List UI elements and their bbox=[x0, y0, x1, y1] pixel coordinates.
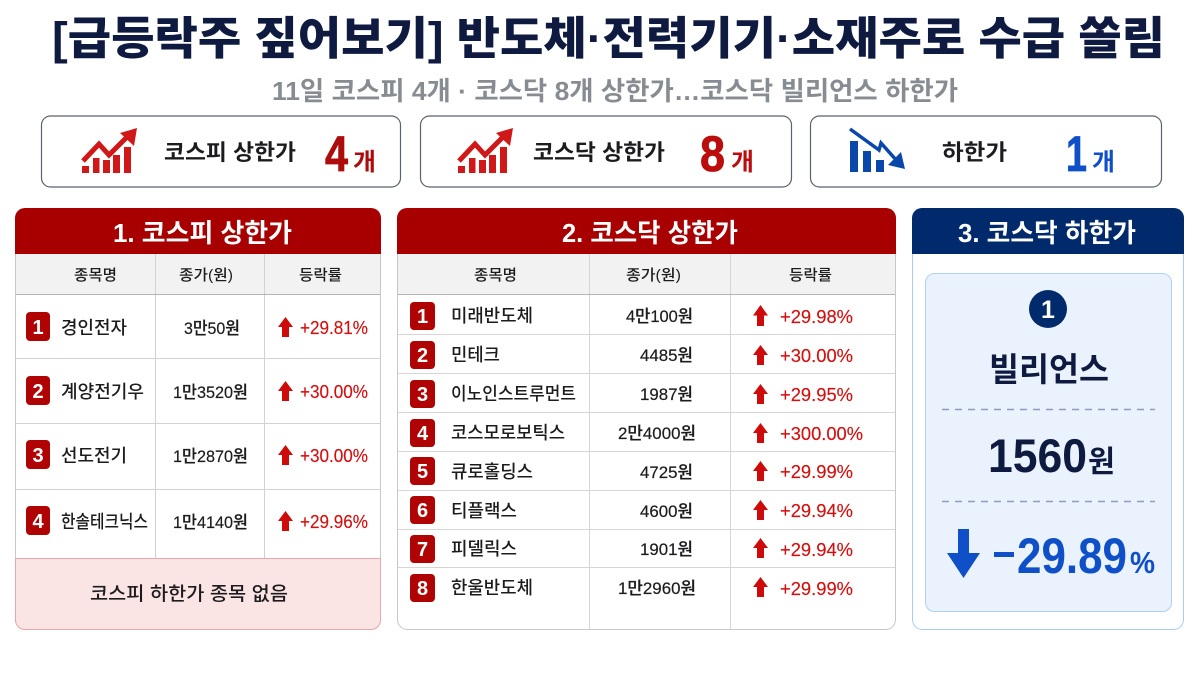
value: 개 bbox=[731, 149, 754, 176]
row 1: +29.98% bbox=[780, 307, 853, 327]
row 5: 5 bbox=[417, 461, 428, 483]
panel: KOSDAQ lower limit bbox=[912, 208, 1184, 630]
panel: KOSDAQ upper limit table bbox=[397, 208, 896, 630]
closing price: 원 bbox=[1088, 446, 1115, 479]
row 1: +29.81% bbox=[300, 318, 368, 338]
rank badge bbox=[1029, 290, 1067, 328]
row 1 bbox=[410, 302, 853, 330]
row 4: 1만4140원 bbox=[173, 513, 248, 532]
row 2: 1만3520원 bbox=[173, 383, 248, 402]
footer note: no lower limit: 코스피 하한가 종목 없음 bbox=[90, 583, 288, 605]
row 2: +30.00% bbox=[300, 382, 368, 402]
label: 하한가 bbox=[942, 140, 1007, 165]
change rate bbox=[947, 528, 1155, 584]
table head bbox=[16, 254, 380, 294]
table head: 종가(원) bbox=[626, 267, 681, 284]
panel header: 1. 코스피 상한가 bbox=[113, 218, 292, 248]
table head: 등락률 bbox=[299, 267, 342, 284]
icon: rising chart bbox=[82, 128, 137, 173]
row 4: 4 bbox=[32, 511, 44, 533]
row 7: 1901원 bbox=[640, 540, 693, 559]
row 5: +29.99% bbox=[780, 462, 853, 482]
change rate: % bbox=[1130, 545, 1155, 580]
table head: 종목명 bbox=[74, 267, 117, 284]
value bbox=[1066, 126, 1115, 182]
row 1: 경인전자 bbox=[61, 318, 127, 338]
panel header: 3. 코스닥 하한가 bbox=[958, 218, 1136, 248]
change rate: 29.89 bbox=[1017, 528, 1127, 584]
row 3: 3 bbox=[417, 384, 428, 406]
row 2: 2 bbox=[32, 381, 44, 403]
row 2: 민테크 bbox=[451, 345, 500, 365]
value bbox=[325, 126, 376, 182]
value: 1 bbox=[1066, 126, 1087, 182]
row 4: 한솔테크닉스 bbox=[61, 512, 148, 532]
row 5 bbox=[410, 457, 853, 485]
row 2 bbox=[410, 341, 853, 369]
row 3: +30.00% bbox=[300, 446, 368, 466]
row 8: 한울반도체 bbox=[451, 578, 533, 598]
row 6: +29.94% bbox=[780, 501, 853, 521]
row 2 bbox=[26, 376, 368, 405]
row 3 bbox=[26, 440, 368, 469]
table head: 등락률 bbox=[789, 267, 832, 284]
panel header bbox=[15, 208, 381, 254]
row 7: 피델릭스 bbox=[451, 539, 517, 559]
row 6 bbox=[410, 496, 853, 524]
panel header: 2. 코스닥 상한가 bbox=[562, 218, 738, 248]
row 8: 1만2960원 bbox=[618, 579, 696, 598]
row 4: 4 bbox=[417, 423, 429, 445]
row 1 bbox=[26, 312, 368, 341]
panel header bbox=[912, 208, 1184, 254]
row 4 bbox=[410, 419, 863, 447]
title: [급등락주 짚어보기] 반도체·전력기기·소재주로 수급 쏠림 bbox=[52, 13, 1165, 64]
value bbox=[700, 126, 754, 182]
row 5: 큐로홀딩스 bbox=[451, 462, 533, 482]
icon: rising chart bbox=[458, 128, 513, 173]
row 6: 4600원 bbox=[640, 502, 693, 521]
row 2: 계양전기우 bbox=[61, 382, 144, 402]
row 1: 1 bbox=[417, 306, 428, 328]
row 1: 미래반도체 bbox=[451, 306, 533, 326]
row 3: +29.95% bbox=[780, 385, 853, 405]
summary card: lower limit bbox=[810, 116, 1162, 187]
row 3: 1만2870원 bbox=[173, 447, 248, 466]
table head bbox=[398, 254, 895, 294]
stock detail card bbox=[926, 274, 1172, 612]
value: 8 bbox=[700, 126, 725, 182]
value: 개 bbox=[353, 149, 376, 176]
row 3 bbox=[410, 380, 853, 408]
row 8: 8 bbox=[417, 578, 428, 600]
row 1: 3만50원 bbox=[184, 319, 240, 338]
summary card: KOSDAQ upper limit bbox=[420, 116, 792, 187]
row 7: 7 bbox=[417, 539, 428, 561]
closing price: 1560 bbox=[988, 429, 1087, 482]
row 4: +300.00% bbox=[780, 424, 863, 444]
footer note: no lower limit bbox=[16, 558, 380, 630]
summary card: KOSPI upper limit bbox=[42, 116, 400, 187]
row 2: 2 bbox=[417, 345, 428, 367]
table head: 종목명 bbox=[474, 267, 517, 284]
row 6: 티플랙스 bbox=[451, 501, 517, 521]
row 3: 1987원 bbox=[640, 385, 693, 404]
stock name: 빌리언스 bbox=[989, 351, 1109, 388]
row 3: 3 bbox=[32, 445, 44, 467]
row 3: 선도전기 bbox=[61, 446, 127, 466]
row 8: +29.99% bbox=[780, 579, 853, 599]
icon: falling chart bbox=[850, 129, 905, 172]
label: 코스피 상한가 bbox=[164, 140, 296, 165]
panel: KOSPI upper limit table bbox=[15, 208, 381, 630]
row 2: +30.00% bbox=[780, 346, 853, 366]
row 5: 4725원 bbox=[640, 463, 693, 482]
row 1: 4만100원 bbox=[626, 307, 693, 326]
row 4 bbox=[26, 506, 368, 535]
row 4: 코스모로보틱스 bbox=[451, 423, 565, 443]
row 1: 1 bbox=[32, 317, 44, 339]
value: 4 bbox=[325, 126, 348, 182]
subtitle: 11일 코스피 4개 · 코스닥 8개 상한가…코스닥 빌리언스 하한가 bbox=[272, 76, 958, 106]
row 3: 이노인스트루먼트 bbox=[451, 384, 576, 404]
row 7 bbox=[410, 535, 853, 563]
row 4: +29.96% bbox=[300, 512, 368, 532]
row 2: 4485원 bbox=[640, 346, 693, 365]
row 7: +29.94% bbox=[780, 540, 853, 560]
label: 코스닥 상한가 bbox=[533, 140, 665, 165]
value: 개 bbox=[1092, 149, 1115, 176]
panel header bbox=[397, 208, 896, 254]
rank badge: 1 bbox=[1041, 296, 1055, 324]
row 8 bbox=[410, 574, 853, 602]
row 6: 6 bbox=[417, 500, 428, 522]
table head: 종가(원) bbox=[179, 267, 233, 284]
row 4: 2만4000원 bbox=[618, 424, 696, 443]
